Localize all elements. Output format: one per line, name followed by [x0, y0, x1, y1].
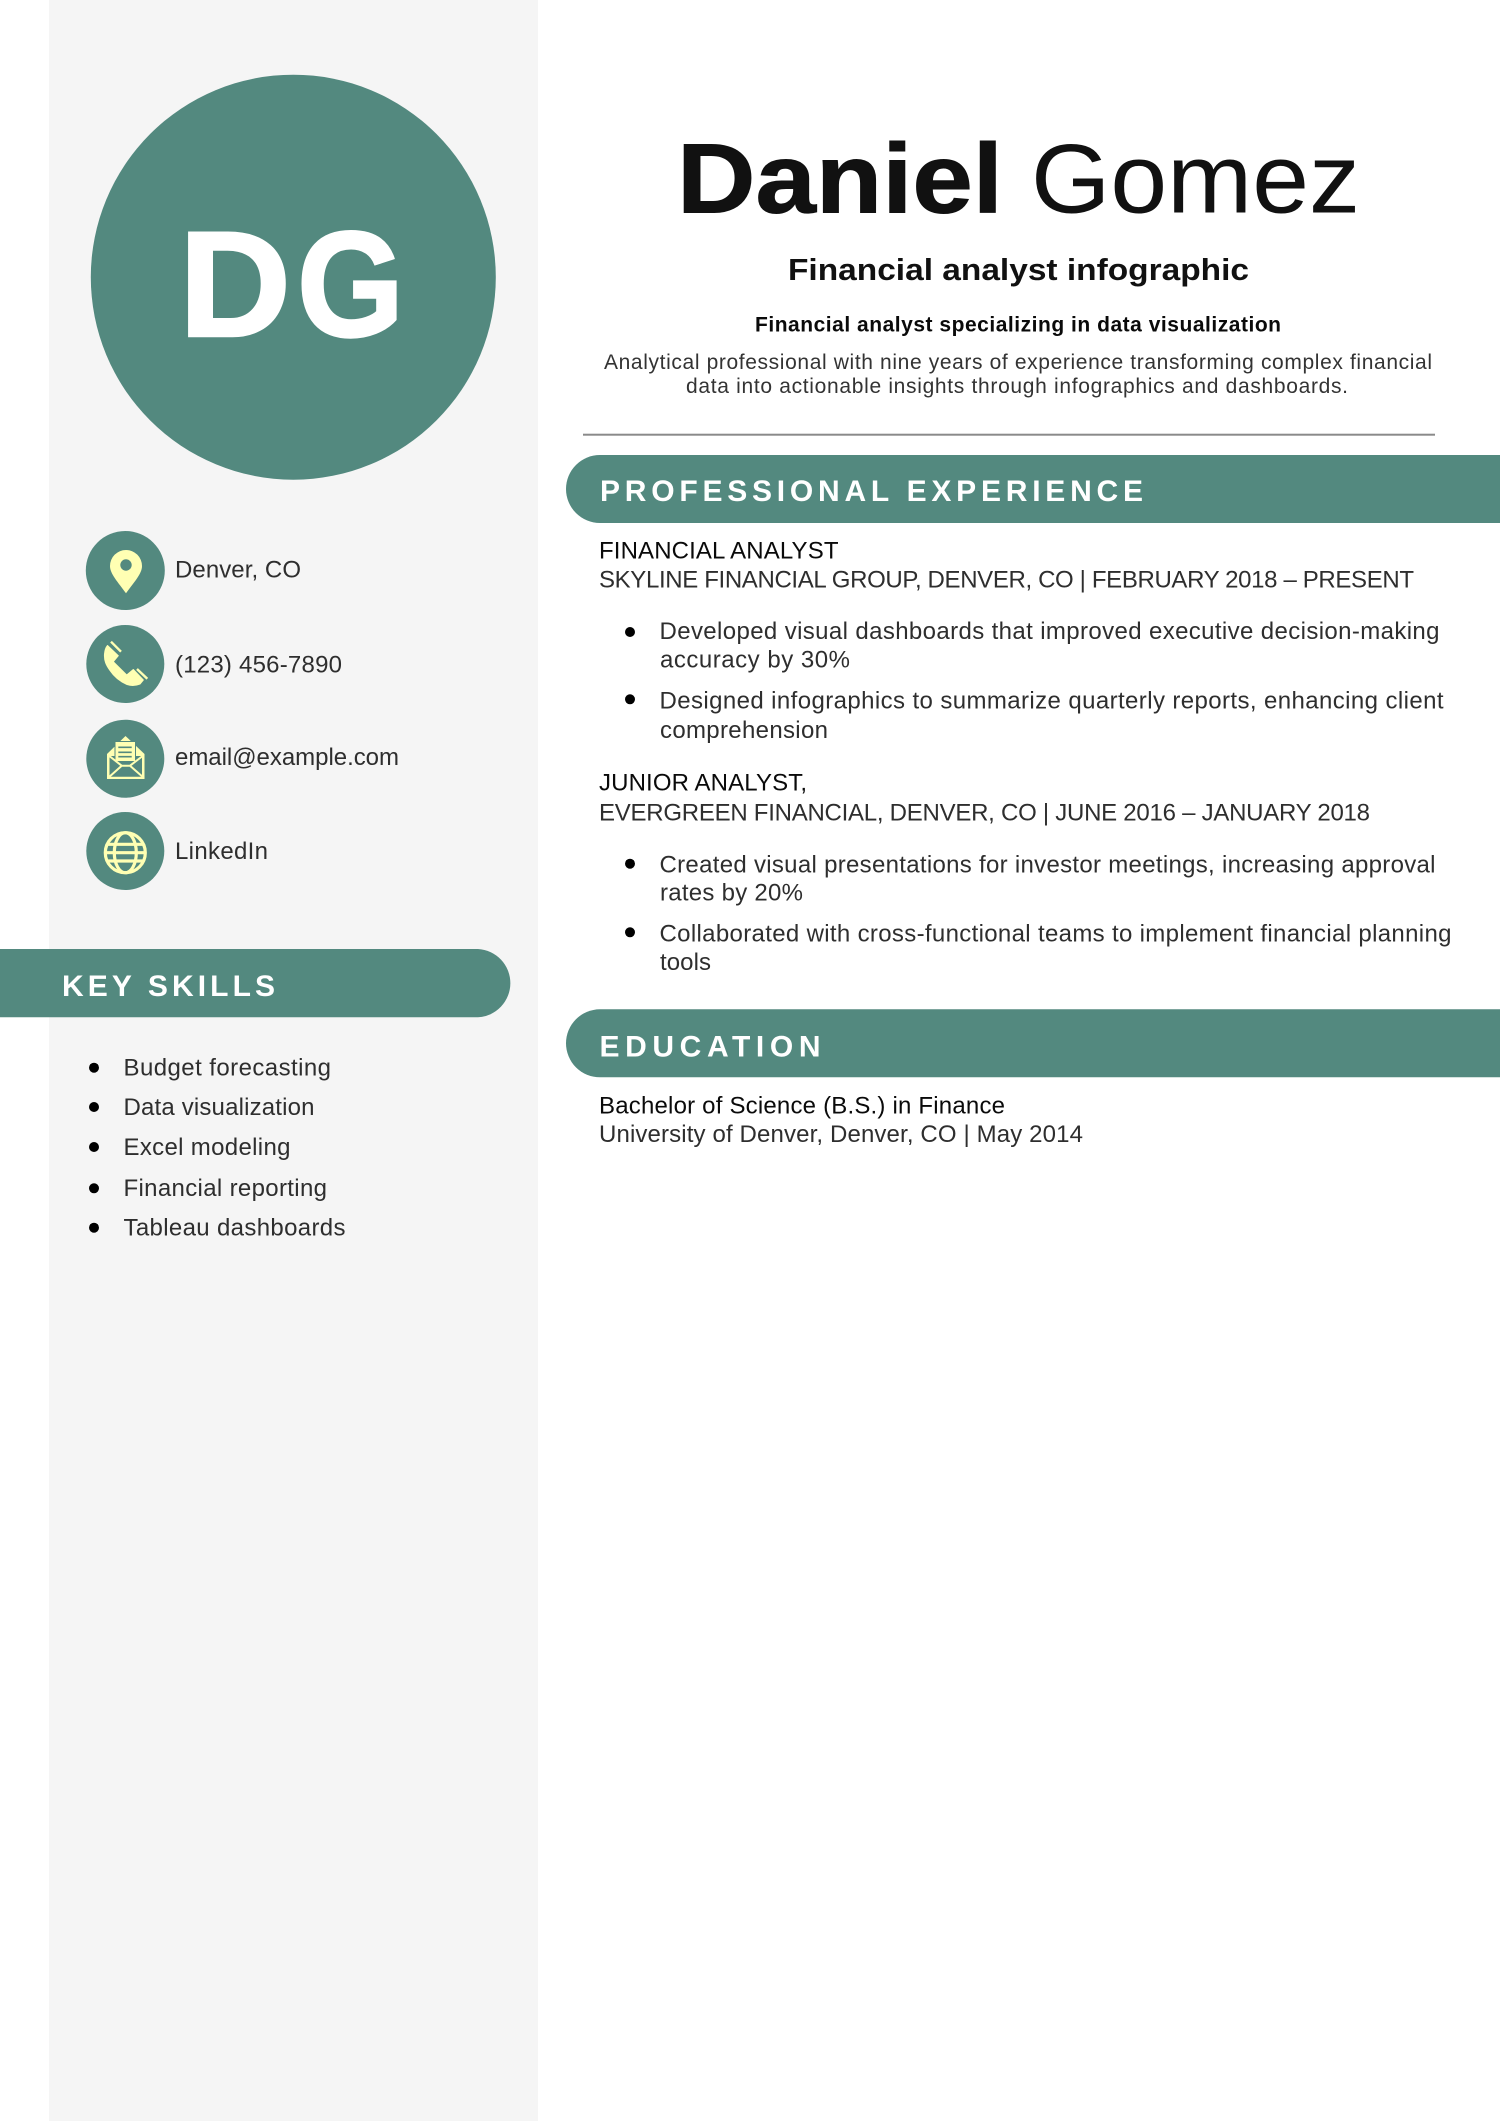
- panel: sidebar: [49, 0, 538, 2121]
- list: key skills: Financial reporting: [124, 1175, 327, 1202]
- heading: professional experience: PROFESSIONAL EXPERIENCE: [600, 475, 1143, 508]
- heading: professional experience: [566, 455, 1500, 523]
- job: financial analyst: Developed visual dashboards that improved executive decision-making: [660, 618, 1440, 645]
- job: junior analyst: Created visual presentations for investor meetings, increasing approval: [660, 851, 1436, 878]
- icon: telephone handset: [86, 625, 164, 703]
- title: name: Daniel: [677, 124, 1003, 234]
- job: junior analyst: tools: [660, 949, 711, 976]
- contact: location: Denver, CO: [175, 557, 301, 584]
- contact: email: [86, 720, 399, 798]
- summary: data into actionable insights through infographics and dashboards.: [686, 375, 1348, 398]
- job: financial analyst: FINANCIAL ANALYST: [599, 537, 839, 564]
- heading: education: [566, 1009, 1500, 1077]
- heading: key skills: KEY SKILLS: [62, 970, 275, 1003]
- contact: linkedin: LinkedIn: [175, 838, 268, 865]
- job: financial analyst: comprehension: [660, 717, 828, 744]
- list: key skills: Tableau dashboards: [124, 1215, 346, 1242]
- contact: linkedin: [86, 812, 268, 890]
- monogram badge: [91, 75, 496, 480]
- job: junior analyst: JUNIOR ANALYST,: [599, 770, 807, 797]
- contact: email: email@example.com: [175, 744, 399, 771]
- job: junior analyst: Collaborated with cross-functional teams to implement financial planning: [660, 921, 1452, 948]
- list: key skills: Excel modeling: [124, 1134, 290, 1161]
- divider: [583, 434, 1435, 436]
- education entry: [599, 1092, 1083, 1148]
- tagline: Financial analyst specializing in data visualization: [755, 314, 1281, 337]
- icon: open envelope: [86, 720, 164, 798]
- icon: map pin: [86, 531, 165, 610]
- icon: globe: [86, 812, 164, 890]
- list: key skills: [89, 1055, 346, 1242]
- job: junior analyst: rates by 20%: [660, 880, 803, 907]
- summary: [604, 351, 1432, 398]
- job: financial analyst: [599, 537, 1444, 744]
- job: financial analyst: accuracy by 30%: [660, 647, 850, 674]
- title: name: Gomez: [1031, 124, 1360, 234]
- title: name: [677, 124, 1360, 234]
- contact: phone: (123) 456-7890: [175, 651, 342, 678]
- job: junior analyst: [599, 770, 1452, 976]
- job: financial analyst: Designed infographics to summarize quarterly reports, enhancing client: [660, 687, 1444, 714]
- education entry: University of Denver, Denver, CO | May 2014: [599, 1121, 1083, 1148]
- contact: location: [86, 531, 301, 610]
- job: junior analyst: EVERGREEN FINANCIAL, DENVER, CO | JUNE 2016 – JANUARY 2018: [599, 800, 1370, 827]
- subtitle: Financial analyst infographic: [788, 252, 1249, 287]
- list: key skills: Budget forecasting: [124, 1055, 331, 1082]
- job: financial analyst: SKYLINE FINANCIAL GROUP, DENVER, CO | FEBRUARY 2018 – PRESENT: [599, 566, 1414, 593]
- summary: Analytical professional with nine years of experience transforming complex financial: [604, 351, 1432, 374]
- monogram badge: D: [179, 200, 291, 368]
- heading: education: EDUCATION: [600, 1030, 820, 1063]
- contact: phone: [86, 625, 342, 703]
- list: key skills: Data visualization: [124, 1094, 314, 1121]
- heading: key skills: [0, 949, 510, 1017]
- monogram badge: G: [297, 200, 404, 368]
- education entry: Bachelor of Science (B.S.) in Finance: [599, 1092, 1005, 1119]
